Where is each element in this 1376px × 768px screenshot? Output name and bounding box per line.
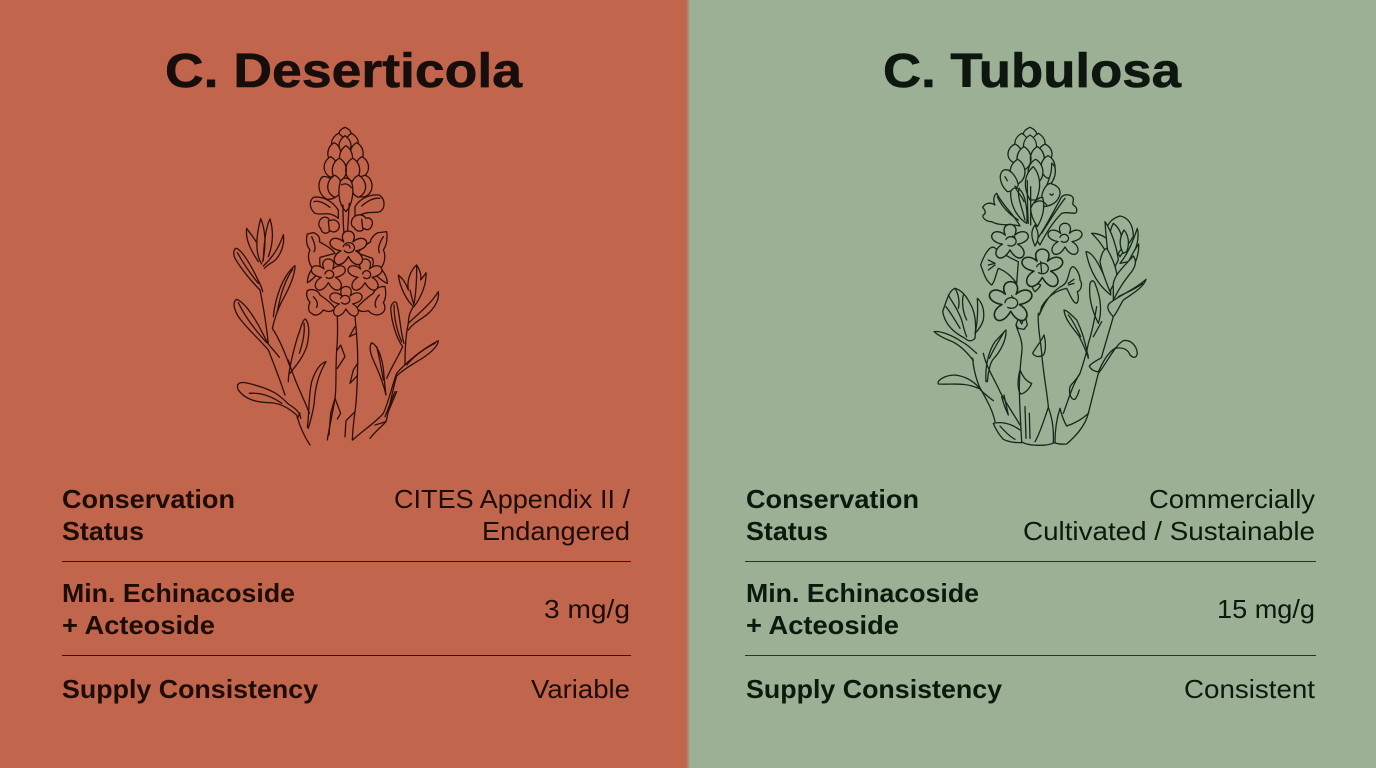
right branch and leaves	[353, 341, 438, 440]
title: C. Deserticola: C. Deserticola	[165, 45, 522, 98]
right branch	[1063, 307, 1097, 413]
row: min echinacoside + acteoside	[746, 578, 1315, 640]
flower spike: cone scales	[319, 127, 372, 212]
left bud	[943, 288, 976, 341]
side flower left top	[983, 193, 1077, 246]
row: conservation status: Status	[746, 516, 828, 546]
row: conservation status	[746, 484, 1315, 546]
flowers	[311, 231, 382, 316]
row: conservation status: Endangered	[482, 516, 630, 546]
row: supply consistency	[746, 674, 1316, 704]
right bud	[1086, 216, 1139, 300]
row: conservation status: Commercially	[1149, 484, 1315, 514]
row: conservation status	[62, 484, 631, 546]
row: min echinacoside + acteoside: + Acteoside	[62, 610, 215, 640]
flower spike: cone scales	[1000, 127, 1060, 223]
row: min echinacoside + acteoside: 15 mg/g	[1217, 594, 1315, 624]
side trumpet flowers	[981, 247, 1081, 315]
row: min echinacoside + acteoside: 3 mg/g	[544, 594, 630, 624]
row: conservation status: Conservation	[62, 484, 235, 514]
row: min echinacoside + acteoside: Min. Echinacoside	[62, 578, 295, 608]
illustration: C. tubulosa plant	[934, 127, 1146, 445]
flower remnant at stem	[1016, 315, 1027, 329]
illustration: C. deserticola plant	[234, 127, 439, 445]
flowers	[989, 223, 1082, 321]
panel: C. Deserticola	[0, 0, 688, 768]
upper paired flowers	[310, 195, 384, 233]
left branch and leaves	[237, 382, 310, 445]
row: min echinacoside + acteoside: Min. Echinacoside	[746, 578, 979, 608]
row: supply consistency	[62, 674, 630, 704]
row: supply consistency: Supply Consistency	[746, 674, 1003, 704]
left branch	[983, 353, 1020, 425]
row: conservation status: Status	[62, 516, 144, 546]
table: C. Deserticola attributes	[62, 484, 631, 704]
row: min echinacoside + acteoside	[62, 578, 630, 640]
row: conservation status: Conservation	[746, 484, 919, 514]
stem	[327, 317, 358, 440]
row: supply consistency: Variable	[531, 674, 630, 704]
row: supply consistency: Consistent	[1184, 674, 1316, 704]
base and main stem	[1016, 325, 1088, 445]
side flowers	[307, 232, 387, 315]
row: min echinacoside + acteoside: + Acteoside	[746, 610, 899, 640]
row: supply consistency: Supply Consistency	[62, 674, 319, 704]
row: conservation status: CITES Appendix II /	[394, 484, 631, 514]
panel: C. Tubulosa	[686, 0, 1376, 768]
table: C. Tubulosa attributes	[745, 484, 1316, 704]
row: conservation status: Cultivated / Sustainable	[1023, 516, 1315, 546]
title: C. Tubulosa: C. Tubulosa	[883, 45, 1181, 98]
